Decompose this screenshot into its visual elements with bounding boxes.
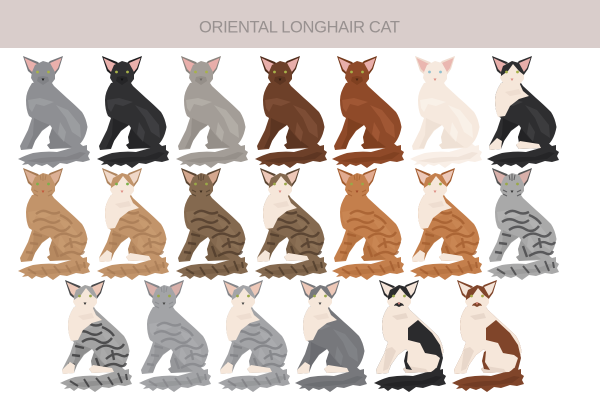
cat: grey tabby bbox=[139, 280, 211, 392]
cat: black solid bbox=[97, 56, 169, 168]
cat: cream white bbox=[410, 56, 482, 168]
cat: grey tabby with white bbox=[218, 280, 290, 392]
title: ORIENTAL LONGHAIR CAT bbox=[199, 18, 400, 36]
cat: blue solid bbox=[18, 56, 90, 168]
cat: silver tabby bbox=[487, 168, 559, 280]
cat: black van pattern bbox=[374, 280, 446, 392]
cat: brown van pattern bbox=[452, 280, 524, 392]
cat: taupe solid bbox=[176, 56, 248, 168]
cat: brown tabby with white bbox=[255, 168, 327, 280]
cat: orange tabby bbox=[332, 168, 404, 280]
cat: tan tabby bbox=[18, 168, 90, 280]
cat: cinnamon solid bbox=[332, 56, 404, 168]
cat: dark silver tabby with white bbox=[60, 280, 132, 392]
cat: tan tabby with white bbox=[97, 168, 169, 280]
cat: chocolate solid bbox=[255, 56, 327, 168]
cat: orange tabby with white bbox=[410, 168, 482, 280]
cat: grey with white bbox=[295, 280, 367, 392]
cat: black and white bbox=[487, 56, 559, 168]
cat: brown tabby bbox=[176, 168, 248, 280]
header band with title bbox=[0, 0, 600, 48]
